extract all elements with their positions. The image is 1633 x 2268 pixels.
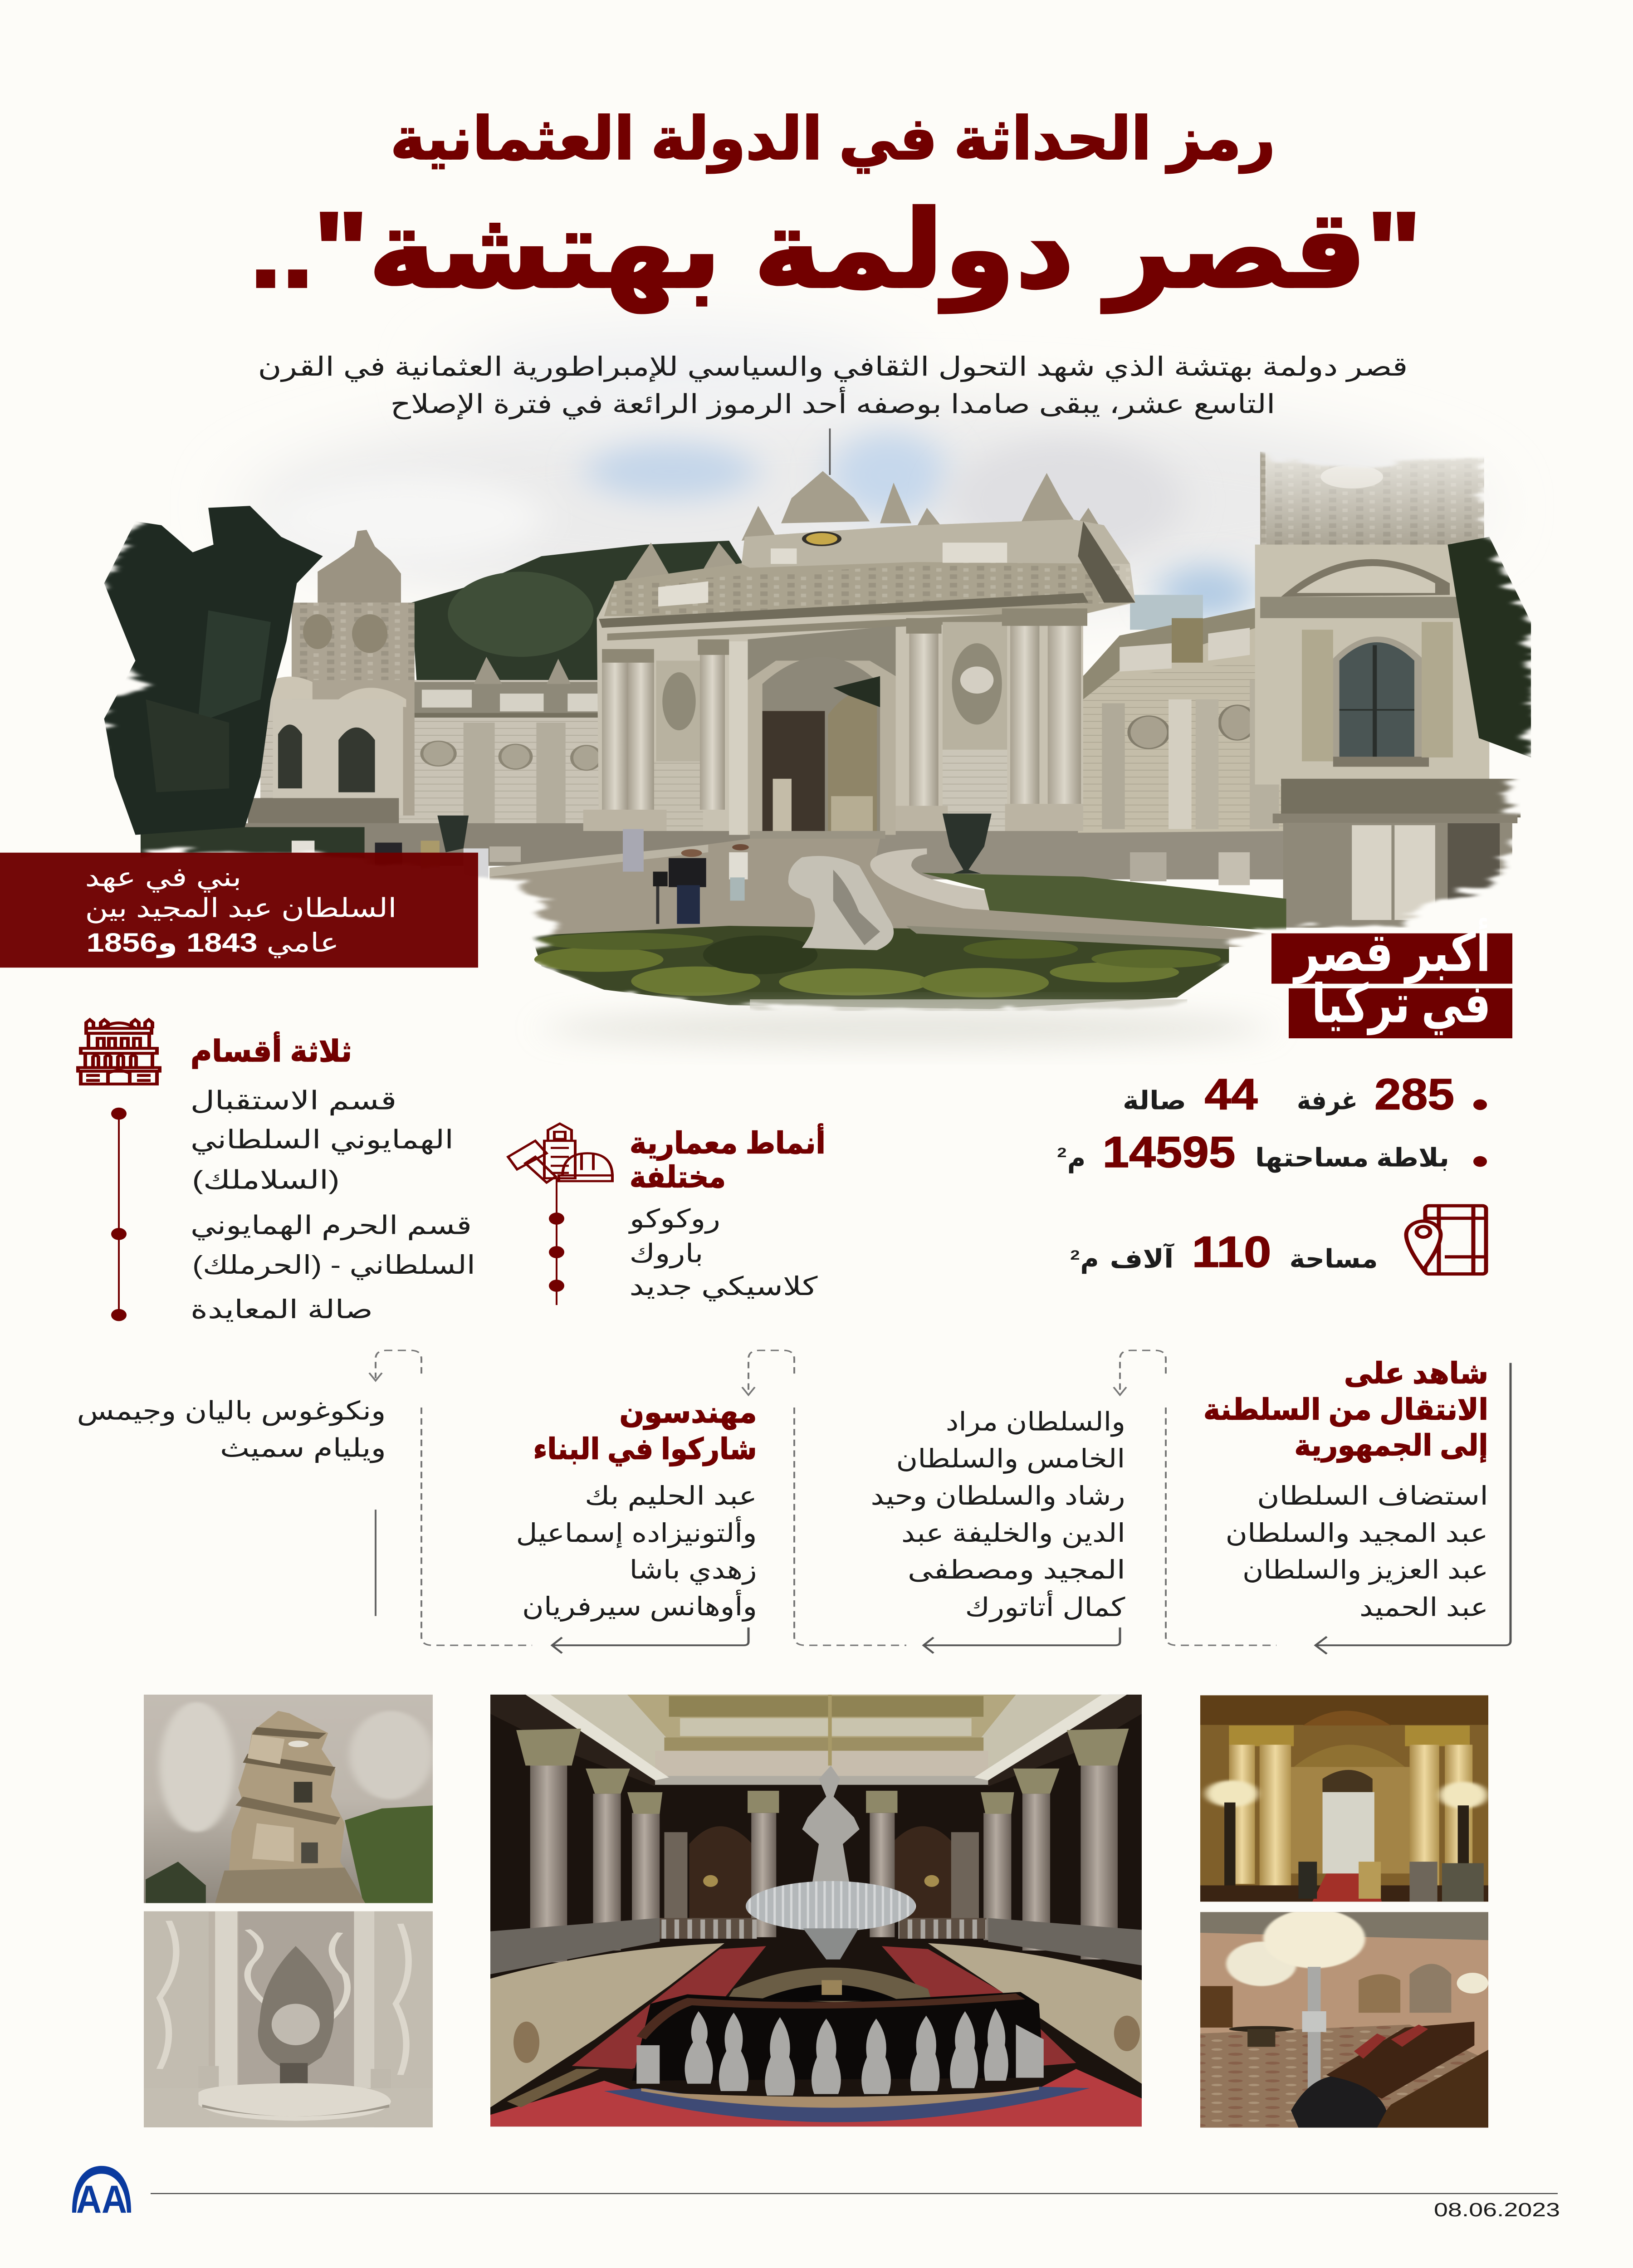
icon: building, hammer, helmet (508, 1124, 612, 1183)
icon: AA logo: AA (76, 2177, 127, 2221)
trees behind left wing (411, 541, 755, 680)
footer rule (151, 2193, 1558, 2194)
floor area unit: 2 (1057, 1145, 1067, 1160)
date: 08.06.2023 (1434, 2199, 1560, 2220)
heading: الانتقال من السلطنة (1203, 1393, 1488, 1427)
rooms figure: 285 (1374, 1070, 1454, 1119)
body text: عبد الحليم بك (585, 1481, 757, 1511)
right wing (1078, 607, 1286, 833)
list of styles (628, 1204, 818, 1301)
curved curb (870, 848, 992, 910)
intro paragraph: التاسع عشر، يبقى صامدا بوصفه أحد الرموز الرائعة في فترة الإصلاح (390, 386, 1275, 420)
total area label: مساحة (1289, 1244, 1378, 1273)
list of sections: قسم الحرم الهمايوني (191, 1211, 472, 1240)
gravel ground (489, 839, 1286, 947)
photo: marble fountain (144, 1911, 433, 2127)
body text: والسلطان مراد (946, 1407, 1125, 1437)
floor area figure: 14595 (1102, 1128, 1235, 1177)
arrow (1315, 1363, 1511, 1654)
total area unit (1070, 1242, 1174, 1274)
body text: كمال أتاتورك (965, 1590, 1125, 1623)
column: engineers (516, 1350, 906, 1653)
panel: key figures (1057, 1070, 1487, 1276)
icon: map pin (1406, 1206, 1486, 1274)
floor area unit: م (1067, 1144, 1085, 1173)
halls label: صالة (1123, 1086, 1186, 1115)
title line one: رمز الحداثة في الدولة العثمانية (390, 106, 1275, 174)
total area unit: م (1081, 1244, 1099, 1274)
body text: زهدي باشا (629, 1555, 757, 1585)
solid line (375, 1510, 376, 1616)
timeline dots (549, 1179, 564, 1305)
floor area label: بلاطة مساحتها (1255, 1143, 1449, 1173)
column: sultans continued (871, 1350, 1276, 1653)
body text: عبد الحميد (1359, 1593, 1488, 1622)
list of sections: صالة المعايدة (191, 1295, 373, 1324)
red caption box: عامي 1843 و1856 (86, 928, 339, 958)
body text: وألتونيزاده إسماعيل (516, 1516, 757, 1548)
body text (871, 1407, 1125, 1623)
floor area unit (1057, 1144, 1085, 1173)
heading: مهندسون (620, 1396, 757, 1430)
callout: largest palace in Turkey (1271, 918, 1512, 1038)
solid arrow (552, 1628, 748, 1653)
heading (533, 1396, 757, 1466)
building glimpse right (1130, 595, 1203, 630)
body text (516, 1481, 757, 1622)
photo: golden hall (1200, 1695, 1488, 1901)
mist under garden (544, 1012, 1270, 1045)
body text: الدين والخليفة عبد (901, 1518, 1125, 1548)
rooms label: غرفة (1297, 1086, 1358, 1116)
halls figure: 44 (1205, 1070, 1257, 1119)
list of styles: روكوكو (628, 1204, 720, 1234)
pinnacles and crests (625, 471, 1102, 582)
heading: شاركوا في البناء (533, 1432, 757, 1466)
left wing (260, 657, 615, 831)
body text: المجيد ومصطفى (908, 1555, 1125, 1585)
dashed arrow into column (1114, 1350, 1276, 1645)
list of sections (190, 1086, 475, 1324)
timeline dots (111, 1108, 127, 1321)
red caption box: السلطان عبد المجيد بين (85, 894, 396, 924)
intro paragraph: قصر دولمة بهتشة الذي شهد التحول الثقافي والسياسي للإمبراطورية العثمانية في القرن (258, 352, 1408, 382)
dark hedge left (141, 827, 365, 858)
dark cedar tree (104, 506, 323, 835)
heading: مختلفة (630, 1161, 726, 1194)
hedge garden (531, 926, 1229, 1011)
heading: أنماط معمارية (630, 1124, 826, 1160)
heading: إلى الجمهورية (1295, 1429, 1488, 1462)
hero photo: Dolmabahce palace gate (104, 429, 1531, 1011)
visitors (292, 829, 749, 924)
total area figure: 110 (1192, 1227, 1271, 1276)
urns (437, 814, 992, 874)
flag pole (829, 429, 831, 475)
column: witness to the transition (1203, 1357, 1511, 1654)
stairs ledge (489, 845, 708, 877)
list of sections: (السلاملك) (192, 1165, 339, 1194)
photo: clock tower (144, 1695, 433, 1903)
title line two: "قصر دولمة بهتشة".. (249, 191, 1421, 313)
body text: ونكوغوس باليان وجيمس (77, 1396, 386, 1426)
panel: architectural styles (508, 1124, 826, 1305)
body text: عبد العزيز والسلطان (1242, 1555, 1488, 1585)
body text: استضاف السلطان (1257, 1481, 1488, 1510)
heading (1203, 1357, 1488, 1462)
icon: palace (78, 1020, 160, 1084)
total area unit: 2 (1070, 1248, 1080, 1263)
callout: largest palace in Turkey: أكبر قصر (1292, 918, 1491, 984)
sky behind palace (249, 325, 1474, 621)
dashed arrow into column (742, 1350, 906, 1645)
total area unit: آلاف (1110, 1242, 1174, 1273)
body text (77, 1396, 386, 1463)
icon: AA logo (72, 2166, 131, 2221)
column: engineers continued (77, 1350, 532, 1645)
bullet (1473, 1156, 1487, 1167)
bullet (1473, 1100, 1487, 1110)
list of styles: كلاسيكي جديد (630, 1271, 818, 1301)
body text (1226, 1481, 1488, 1622)
body text: عبد المجيد والسلطان (1226, 1518, 1488, 1548)
panel: three sections (78, 1020, 475, 1324)
body text: الخامس والسلطان (896, 1444, 1125, 1474)
heading: شاهد على (1344, 1357, 1488, 1389)
body text: ويليام سميث (220, 1433, 386, 1463)
central gate (583, 471, 1135, 839)
callout: largest palace in Turkey: في تركيا (1312, 974, 1491, 1035)
list of sections: السلطاني - (الحرملك) (192, 1250, 475, 1280)
red caption box: بني في عهد (85, 863, 241, 893)
body text: وأوهانس سيرفريان (522, 1589, 757, 1622)
solid arrow (924, 1628, 1120, 1653)
list of sections: الهمايوني السلطاني (191, 1125, 454, 1154)
dashed arrow into column (369, 1350, 532, 1645)
intro paragraph (258, 352, 1408, 420)
list of styles: باروك (629, 1239, 703, 1269)
left tower (248, 530, 415, 823)
list of sections: قسم الاستقبال (190, 1086, 396, 1116)
stone lion (788, 856, 894, 950)
lower stone base (245, 823, 766, 866)
red caption box (0, 853, 478, 968)
right tower (1255, 452, 1531, 928)
photo: chandelier hall (1200, 1909, 1488, 2128)
photo: crystal staircase (490, 1695, 1142, 2126)
body text: رشاد والسلطان وحيد (871, 1481, 1125, 1511)
heading (630, 1124, 826, 1194)
heading: ثلاثة أقسام (191, 1032, 352, 1069)
lawn (922, 873, 1286, 932)
